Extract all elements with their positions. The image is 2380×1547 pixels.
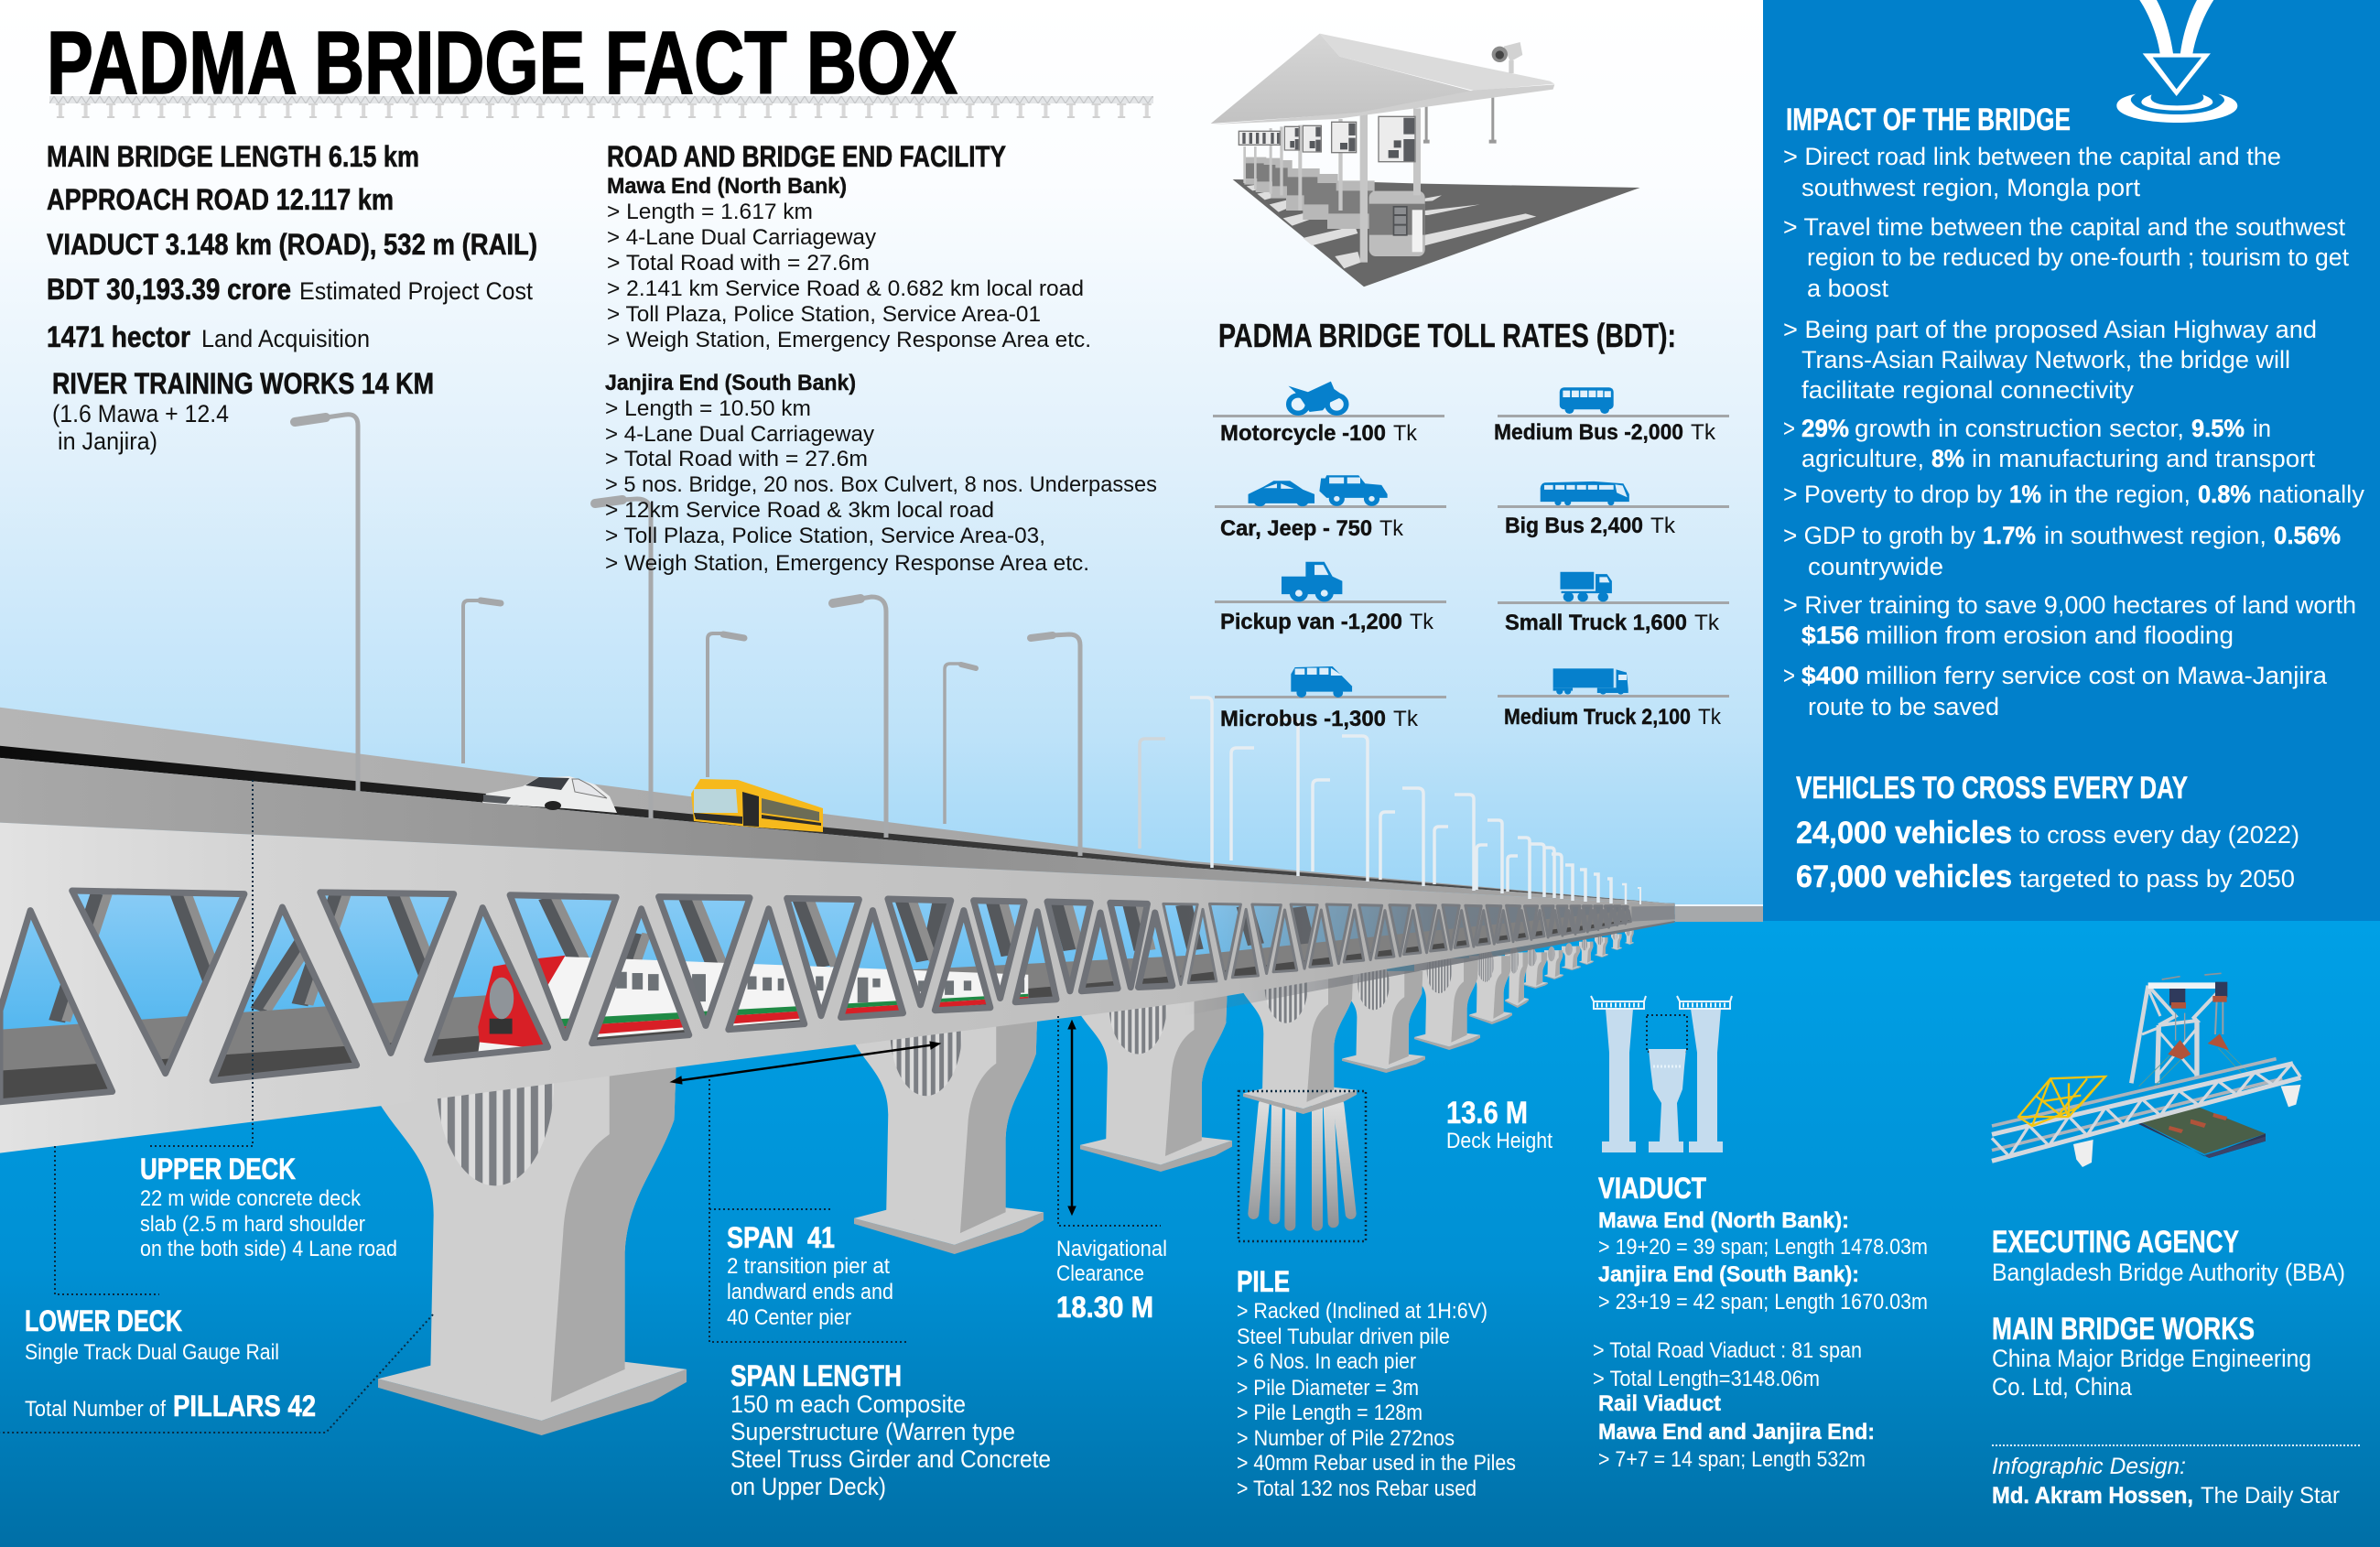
vehicles to cross every day xyxy=(1796,771,2299,894)
upper deck note: on the both side) 4 Lane road xyxy=(140,1237,397,1261)
impact bullet list: million ferry service cost on Mawa-Janjira xyxy=(1866,662,2328,689)
key facts list: MAIN BRIDGE LENGTH 6.15 km xyxy=(47,140,419,173)
icon: microbus xyxy=(1291,666,1352,698)
toll labels: Tk xyxy=(1410,610,1434,634)
upper deck note xyxy=(140,1152,397,1261)
road and bridge end facility: > Total Road with = 27.6m xyxy=(607,251,870,276)
deck height note: 13.6 M xyxy=(1446,1096,1528,1130)
toll labels: Big Bus 2,400 xyxy=(1505,514,1643,538)
train xyxy=(478,956,1028,1053)
road and bridge end facility: Mawa End (North Bank) xyxy=(607,174,847,199)
vehicles to cross every day: 67,000 vehicles xyxy=(1796,860,2012,894)
arrow: span width xyxy=(671,1042,940,1084)
near street lamps xyxy=(295,415,1080,856)
road and bridge end facility: > 5 nos. Bridge, 20 nos. Box Culvert, 8 nos. Underpasses xyxy=(605,472,1157,497)
upper deck note: UPPER DECK xyxy=(140,1152,296,1185)
span note: 2 transition pier at xyxy=(727,1254,890,1279)
impact bullet list: agriculture, xyxy=(1801,445,1924,472)
main bridge works: Co. Ltd, China xyxy=(1992,1373,2133,1401)
road and bridge end facility: > 4-Lane Dual Carriageway xyxy=(607,225,876,250)
toll rate table xyxy=(1213,382,1729,731)
road and bridge end facility: Janjira End (South Bank) xyxy=(605,371,856,395)
impact bullet list: in the region, xyxy=(2049,481,2191,508)
water background xyxy=(0,921,2380,1547)
navigational clearance note: Clearance xyxy=(1056,1261,1144,1286)
toll labels: Tk xyxy=(1393,421,1418,446)
viaduct note: Mawa End and Janjira End: xyxy=(1598,1420,1875,1444)
impact bullet list: > Direct road link between the capital and the xyxy=(1783,143,2281,170)
main foreground pier xyxy=(378,980,687,1435)
key facts list: Estimated Project Cost xyxy=(299,277,533,305)
span piers xyxy=(2073,1085,2300,1167)
icon: motorcycle xyxy=(1288,382,1347,413)
impact bullet list: growth in construction sector, xyxy=(1855,415,2184,442)
key facts list: Land Acquisition xyxy=(201,325,370,352)
far side truss xyxy=(57,894,1307,1022)
toll labels: Small Truck 1,600 xyxy=(1505,611,1687,635)
viaduct note: VIADUCT xyxy=(1598,1172,1706,1205)
icon: viaduct pillars xyxy=(1591,996,1732,1152)
key facts list: RIVER TRAINING WORKS 14 KM xyxy=(52,367,434,400)
second pier xyxy=(854,966,1044,1254)
impact bullet list: 1.7% xyxy=(1983,522,2036,549)
navigational clearance note xyxy=(1056,1237,1167,1324)
icon: medium bus xyxy=(1560,387,1614,414)
main bridge works: China Major Bridge Engineering xyxy=(1992,1345,2311,1372)
impact bullet list: facilitate regional connectivity xyxy=(1801,376,2135,404)
icon: big bus xyxy=(1541,481,1629,505)
key facts list: VIADUCT 3.148 km (ROAD), 532 m (RAIL) xyxy=(47,228,537,261)
bridge: far pier row xyxy=(1342,929,1634,1073)
span note: 40 Center pier xyxy=(727,1305,851,1330)
pile note: > Number of Pile 272nos xyxy=(1237,1426,1455,1451)
impact bullet list: $156 xyxy=(1801,622,1859,649)
pile note xyxy=(1237,1265,1516,1501)
pile note: > Pile Length = 128m xyxy=(1237,1401,1423,1425)
impact bullet list: in southwest region, xyxy=(2044,522,2266,549)
span note: landward ends and xyxy=(727,1280,893,1304)
executing agency xyxy=(1992,1225,2345,1286)
icon: arrow into target xyxy=(2116,0,2237,123)
toll row dividers xyxy=(1213,415,1729,698)
panel: impact of the bridge xyxy=(1763,0,2380,921)
far truss darkening xyxy=(1184,898,1675,1016)
impact bullet list: nationally xyxy=(2258,481,2365,508)
vehicles to cross every day: to cross every day (2022) xyxy=(2019,821,2299,849)
key facts list: in Janjira) xyxy=(58,427,157,455)
rail track band xyxy=(0,914,1675,1102)
lower deck note: Single Track Dual Gauge Rail xyxy=(25,1340,279,1365)
icon: small truck xyxy=(1560,572,1612,601)
front truss with triangular openings xyxy=(0,823,1675,1153)
viaduct note: > 23+19 = 42 span; Length 1670.03m xyxy=(1598,1290,1928,1314)
toll labels xyxy=(1220,420,1722,731)
key facts list: (1.6 Mawa + 12.4 xyxy=(52,400,229,427)
vehicles to cross every day: VEHICLES TO CROSS EVERY DAY xyxy=(1796,771,2188,806)
canopy roof xyxy=(1211,34,1474,124)
rear street lamps xyxy=(463,600,1165,849)
impact bullet list: > GDP to groth by xyxy=(1783,522,1975,549)
toll labels: Motorcycle -100 xyxy=(1220,421,1386,446)
pile note: Steel Tubular driven pile xyxy=(1237,1325,1450,1349)
distant street lamps xyxy=(1190,698,1640,904)
impact bullet list: a boost xyxy=(1807,275,1888,302)
toll labels: Microbus -1,300 xyxy=(1220,707,1386,731)
span length note: 150 m each Composite xyxy=(730,1390,966,1418)
impact bullet list: > Being part of the proposed Asian Highway and xyxy=(1783,316,2317,343)
road and bridge end facility: > Total Road with = 27.6m xyxy=(605,447,868,471)
road and bridge end facility: ROAD AND BRIDGE END FACILITY xyxy=(607,140,1006,173)
pile note: > Pile Diameter = 3m xyxy=(1237,1376,1419,1401)
road and bridge end facility: > 4-Lane Dual Carriageway xyxy=(605,422,874,447)
pile note: PILE xyxy=(1237,1265,1290,1298)
viaduct note: Rail Viaduct xyxy=(1598,1391,1721,1416)
icon: pickup van xyxy=(1282,562,1342,601)
main bridge works xyxy=(1992,1312,2311,1401)
toll rates heading: PADMA BRIDGE TOLL RATES (BDT): xyxy=(1218,317,1676,354)
pier with pile foundation xyxy=(1243,948,1357,1114)
viaduct note: > 7+7 = 14 span; Length 532m xyxy=(1598,1447,1866,1472)
impact bullet list: 8% xyxy=(1931,445,1964,472)
pile note: > 6 Nos. In each pier xyxy=(1237,1349,1416,1374)
credits: Md. Akram Hossen, xyxy=(1992,1483,2193,1509)
impact bullet list: 1% xyxy=(2009,481,2041,508)
title: PADMA BRIDGE FACT BOX xyxy=(47,13,957,113)
lane signs xyxy=(1239,116,1415,162)
road and bridge end facility: > Toll Plaza, Police Station, Service Area-03, xyxy=(605,524,1045,548)
impact bullet list: > Travel time between the capital and the southwest xyxy=(1783,213,2345,241)
toll labels: Medium Truck 2,100 xyxy=(1504,705,1691,730)
bridge superstructure xyxy=(0,708,1675,1153)
impact bullet list: million from erosion and flooding xyxy=(1866,622,2234,649)
executing agency: Bangladesh Bridge Authority (BBA) xyxy=(1992,1259,2345,1286)
impact bullet list: in xyxy=(2253,415,2271,442)
impact bullet list: 0.56% xyxy=(2274,522,2341,549)
impact bullet list: > xyxy=(1783,415,1795,442)
viaduct note: > 19+20 = 39 span; Length 1478.03m xyxy=(1598,1235,1928,1260)
pillars note: PILLARS 42 xyxy=(173,1390,316,1423)
navigational clearance note: 18.30 M xyxy=(1056,1291,1153,1324)
icon: six raked piles under pier xyxy=(1253,1105,1351,1226)
impact bullet list: countrywide xyxy=(1808,553,1943,580)
key facts list xyxy=(47,140,537,455)
key facts list: 1471 hector xyxy=(47,320,190,353)
road and bridge end facility: > Weigh Station, Emergency Response Area etc. xyxy=(607,328,1091,352)
sky background xyxy=(0,0,2380,921)
lower deck floor xyxy=(0,906,1675,1102)
key facts list: APPROACH ROAD 12.117 km xyxy=(47,183,394,216)
arrow: navigational clearance xyxy=(1068,1021,1076,1215)
crane tower xyxy=(2131,973,2247,1087)
security camera xyxy=(1492,42,1522,73)
viaduct note: Janjira End (South Bank): xyxy=(1598,1262,1859,1287)
toll labels: Tk xyxy=(1694,611,1720,635)
impact bullet list: $400 xyxy=(1801,662,1859,689)
vehicles to cross every day: 24,000 vehicles xyxy=(1796,816,2012,850)
far truss fade band xyxy=(1631,906,1675,922)
viaduct note: Mawa End (North Bank): xyxy=(1598,1208,1849,1233)
span note xyxy=(727,1221,893,1330)
vehicles to cross every day: targeted to pass by 2050 xyxy=(2019,865,2295,892)
black median line xyxy=(0,746,1675,903)
toll labels: Tk xyxy=(1691,420,1716,445)
toll labels: Tk xyxy=(1698,705,1722,730)
credits: The Daily Star xyxy=(2201,1483,2340,1509)
icon: car and jeep xyxy=(1249,475,1388,506)
impact bullet list: region to be reduced by one-fourth ; tourism to get xyxy=(1807,243,2349,271)
road and bridge end facility xyxy=(605,140,1157,576)
lower deck note: LOWER DECK xyxy=(25,1304,182,1337)
upper deck note: slab (2.5 m hard shoulder xyxy=(140,1212,365,1237)
icon: floating crane installing truss span xyxy=(1992,973,2300,1167)
yellow lifting frame xyxy=(2018,1076,2105,1126)
span length note xyxy=(730,1359,1051,1500)
callout lines xyxy=(0,780,1687,1433)
impact bullet list: 9.5% xyxy=(2191,415,2245,442)
road and bridge end facility: > 12km Service Road & 3km local road xyxy=(605,498,994,523)
barge xyxy=(2136,1108,2266,1158)
toll labels: Tk xyxy=(1379,516,1404,541)
impact bullet list: 29% xyxy=(1801,415,1849,442)
lower deck note xyxy=(25,1304,279,1365)
deck height note: Deck Height xyxy=(1446,1129,1552,1153)
icon: medium truck xyxy=(1553,668,1628,695)
deck height note xyxy=(1446,1096,1552,1153)
pile note: > 40mm Rebar used in the Piles xyxy=(1237,1451,1516,1476)
viaduct note xyxy=(1593,1172,1928,1472)
road and bridge end facility: > Toll Plaza, Police Station, Service Area-01 xyxy=(607,302,1041,327)
impact bullet list: 0.8% xyxy=(2198,481,2251,508)
far end of the bridge strip xyxy=(1675,904,1763,922)
truss interior sky xyxy=(0,884,1675,1109)
viaduct note: > Total Length=3148.06m xyxy=(1593,1367,1820,1391)
icon: toll plaza xyxy=(1211,34,1640,287)
deck fascia xyxy=(0,758,1675,905)
impact bullet list: Trans-Asian Railway Network, the bridge will xyxy=(1801,346,2290,373)
impact bullet list xyxy=(1783,143,2365,720)
navigational clearance note: Navigational xyxy=(1056,1237,1167,1261)
viaduct note: > Total Road Viaduct : 81 span xyxy=(1593,1338,1862,1363)
truss opening edges far xyxy=(1163,903,1631,985)
impact bullet list: southwest region, Mongla port xyxy=(1801,174,2140,201)
main bridge works: MAIN BRIDGE WORKS xyxy=(1992,1312,2255,1347)
white car xyxy=(482,776,617,813)
executing agency: EXECUTING AGENCY xyxy=(1992,1225,2239,1260)
truss opening edges near xyxy=(0,891,1173,1102)
upper deck note: 22 m wide concrete deck xyxy=(140,1186,362,1211)
span length note: on Upper Deck) xyxy=(730,1473,886,1500)
road and bridge end facility: > 2.141 km Service Road & 0.682 km local road xyxy=(607,276,1084,301)
crane hoists xyxy=(2168,982,2229,1059)
third pier xyxy=(1080,957,1232,1172)
toll labels: Tk xyxy=(1650,514,1676,538)
toll labels: Car, Jeep - 750 xyxy=(1220,516,1372,541)
pillars note: Total Number of xyxy=(25,1397,166,1422)
pile note: > Total 132 nos Rebar used xyxy=(1237,1477,1477,1501)
span length note: Steel Truss Girder and Concrete xyxy=(730,1445,1051,1473)
key facts list: BDT 30,193.39 crore xyxy=(47,273,291,306)
toll labels: Medium Bus -2,000 xyxy=(1494,420,1683,445)
road and bridge end facility: > Weigh Station, Emergency Response Area etc. xyxy=(605,551,1089,576)
credits: Infographic Design: xyxy=(1992,1454,2186,1479)
mini bridge divider xyxy=(49,96,1153,119)
pillars note xyxy=(25,1390,316,1423)
impact bullet list: in manufacturing and transport xyxy=(1972,445,2316,472)
yellow school bus xyxy=(691,779,823,832)
impact bullet list: > xyxy=(1783,662,1795,689)
credits xyxy=(1992,1454,2340,1509)
toll labels: Tk xyxy=(1393,707,1419,731)
lane booths xyxy=(1244,157,1425,256)
road and bridge end facility: > Length = 10.50 km xyxy=(605,396,811,421)
span length note: SPAN LENGTH xyxy=(730,1359,902,1392)
span length note: Superstructure (Warren type xyxy=(730,1418,1015,1445)
truss span xyxy=(1992,1059,2300,1161)
pile note: > Racked (Inclined at 1H:6V) xyxy=(1237,1299,1488,1324)
impact heading: IMPACT OF THE BRIDGE xyxy=(1786,103,2071,137)
road and bridge end facility: > Length = 1.617 km xyxy=(607,200,813,224)
impact bullet list: route to be saved xyxy=(1808,693,1999,720)
toll labels: Pickup van -1,200 xyxy=(1220,610,1402,634)
span note: SPAN 41 xyxy=(727,1221,835,1254)
roof posts xyxy=(1243,108,1421,263)
road surface xyxy=(0,708,1675,903)
impact bullet list: > River training to save 9,000 hectares of land worth xyxy=(1783,591,2356,619)
impact bullet list: > Poverty to drop by xyxy=(1783,481,2002,508)
